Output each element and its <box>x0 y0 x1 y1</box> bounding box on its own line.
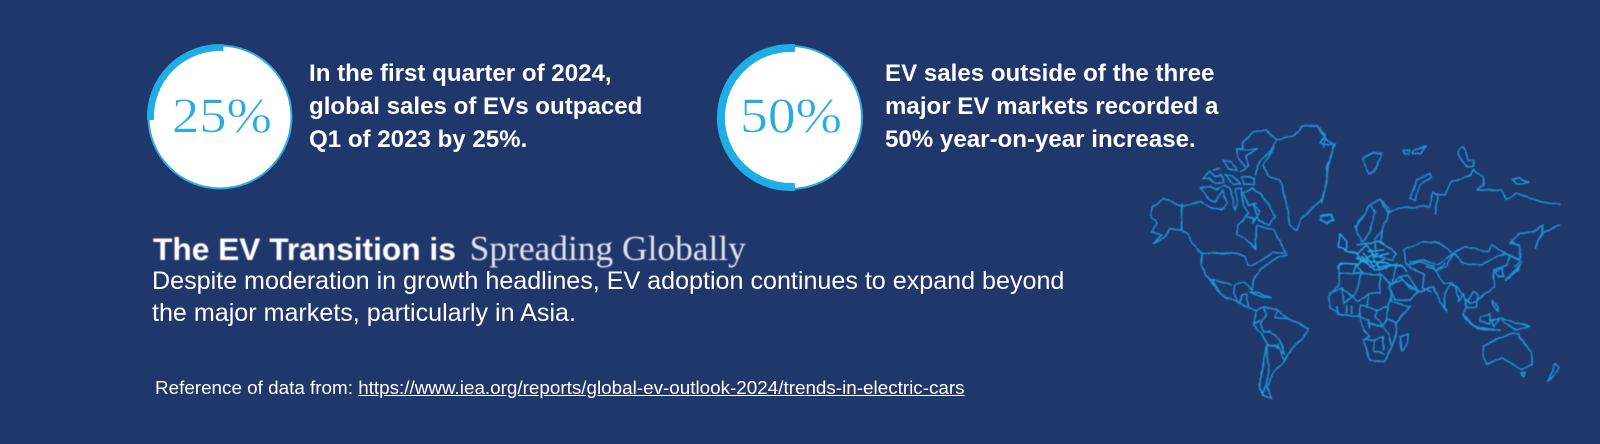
body text: the major markets, particularly in Asia. <box>152 299 576 327</box>
stat text: 50% <box>885 60 1219 153</box>
stat text: 50%: major EV markets recorded a <box>885 93 1218 120</box>
stat text: 25%: Q1 of 2023 by 25%. <box>309 126 527 153</box>
source reference: Reference of data from: https://www.iea.org/reports/global-ev-outlook-2024/trends-in-electric-cars <box>155 377 965 398</box>
stat ring: 25%: 25% <box>172 87 272 143</box>
stat text: 50%: 50% year-on-year increase. <box>885 126 1196 153</box>
stat text: 25%: global sales of EVs outpaced <box>309 93 642 120</box>
body text <box>152 267 1064 327</box>
map: Europe, Africa, Asia and Oceania <box>1320 128 1560 382</box>
stat ring: 50%: 50% <box>740 87 842 143</box>
stat text: 25% <box>309 60 642 153</box>
stat text: 25%: In the first quarter of 2024, <box>309 60 612 87</box>
stat text: 50%: EV sales outside of the three <box>885 60 1214 87</box>
map: Americas and Greenland <box>1151 125 1335 398</box>
heading: The EV Transition is Spreading Globally <box>153 228 746 268</box>
body text: Despite moderation in growth headlines, EV adoption continues to expand beyond <box>152 267 1064 295</box>
